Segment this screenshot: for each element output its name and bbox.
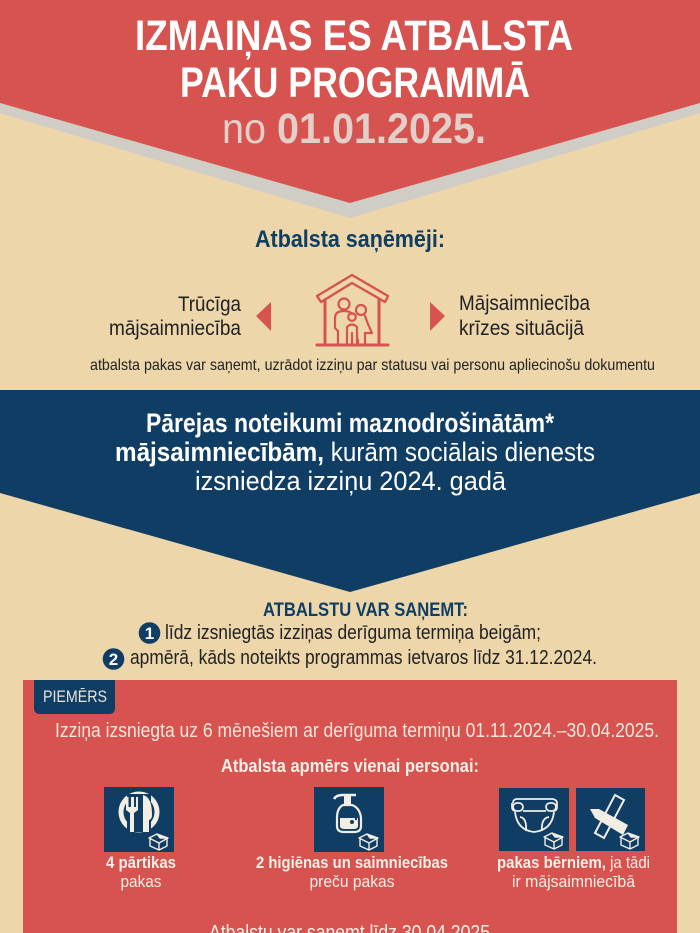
heading: amount per person: Atbalsta apmērs vienai personai: [221, 756, 479, 776]
caption: hygiene: preču pakas [310, 872, 394, 891]
navy panel heading [115, 408, 595, 496]
list item 2: 2 [109, 650, 118, 669]
label: household in crisis [459, 292, 590, 340]
caption: hygiene [256, 853, 448, 891]
navy panel heading: mājsaimniecībām, kurām sociālais dienests [115, 437, 595, 467]
label: needy household: Trūcīga [178, 293, 241, 316]
panel: example [23, 680, 677, 933]
tag: example [34, 680, 115, 714]
title [135, 12, 573, 107]
caption: children: pakas bērniem, ja tādi [497, 853, 650, 872]
list item 1: līdz izsniegtās izziņas derīguma termiņa beigām; [165, 622, 541, 644]
label: household in crisis: krīzes situācijā [459, 317, 584, 340]
caption: hygiene: 2 higiēnas un saimniecības [256, 853, 448, 872]
caption: food: 4 pārtikas [106, 853, 176, 872]
list item 1: 1 [145, 624, 154, 643]
arrow left [256, 302, 271, 331]
heading: can receive support: ATBALSTU VAR SAŅEMT: [263, 600, 468, 621]
caption: children [497, 853, 650, 891]
icon: pencil and ruler [576, 788, 645, 851]
tag: example: PIEMĒRS [43, 687, 107, 706]
caption: food: pakas [120, 872, 162, 891]
date subtitle: no 01.01.2025. [222, 105, 486, 153]
header chevron shadow [0, 103, 700, 218]
caption: food [106, 853, 176, 891]
navy panel heading: Pārejas noteikumi maznodrošinātām* [146, 408, 554, 438]
icon: soap [314, 787, 384, 852]
label: needy household: mājsaimniecība [109, 317, 241, 340]
navy panel heading: izsniedza izziņu 2024. gadā [195, 466, 507, 496]
caption: children: ir mājsaimniecībā [512, 872, 636, 891]
title: PAKU PROGRAMMĀ [180, 59, 530, 107]
icon: food [104, 787, 174, 852]
navy chevron panel [0, 390, 700, 592]
label: needy household [109, 293, 241, 340]
header red chevron [0, 0, 700, 203]
label: household in crisis: Mājsaimniecība [459, 292, 590, 315]
icon: house with family [317, 275, 388, 345]
heading: recipients: Atbalsta saņēmēji: [255, 226, 445, 253]
list item 2: apmērā, kāds noteikts programmas ietvaros līdz 31.12.2024. [130, 647, 597, 669]
arrow right [430, 302, 445, 331]
title: IZMAIŅAS ES ATBALSTA [135, 12, 573, 60]
icon: diaper [499, 788, 569, 851]
